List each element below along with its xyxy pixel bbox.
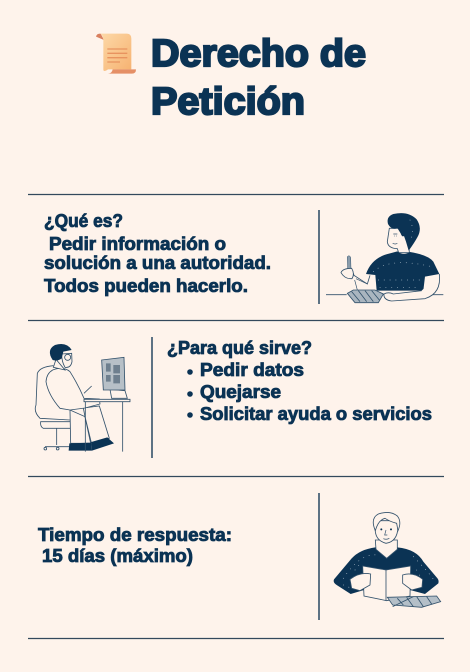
panel: que es	[44, 210, 443, 304]
text: para que sirve	[167, 338, 432, 424]
title: Petición	[151, 81, 305, 123]
text: que es: Pedir información o	[49, 234, 226, 254]
text: que es: Todos pueden hacerlo.	[44, 276, 248, 296]
title: Derecho de	[151, 33, 366, 75]
text: tiempo de respuesta: Tiempo de respuesta:	[38, 525, 232, 545]
text: tiempo de respuesta: 15 días (máximo)	[42, 546, 193, 566]
text: que es	[44, 211, 271, 296]
text: para que sirve: ¿Para qué sirve?	[167, 338, 312, 358]
panel: tiempo de respuesta	[38, 493, 441, 620]
vertical divider	[151, 337, 153, 458]
vertical divider	[318, 210, 320, 304]
illustration: person at computer	[35, 344, 130, 452]
text: para que sirve: Pedir datos	[200, 360, 304, 380]
text: que es: ¿Qué es?	[44, 211, 123, 231]
vertical divider	[318, 493, 320, 620]
text: para que sirve: Quejarse	[200, 382, 281, 402]
title	[151, 33, 366, 123]
text: que es: solución a una autoridad.	[44, 253, 271, 273]
icon: scroll	[96, 34, 136, 74]
illustration: person reading	[334, 512, 441, 607]
text: tiempo de respuesta	[38, 525, 232, 566]
illustration: person writing	[326, 213, 443, 303]
panel: para que sirve	[35, 337, 432, 458]
text: para que sirve: Solicitar ayuda o servicios	[200, 404, 432, 424]
divider lines	[28, 194, 444, 638]
